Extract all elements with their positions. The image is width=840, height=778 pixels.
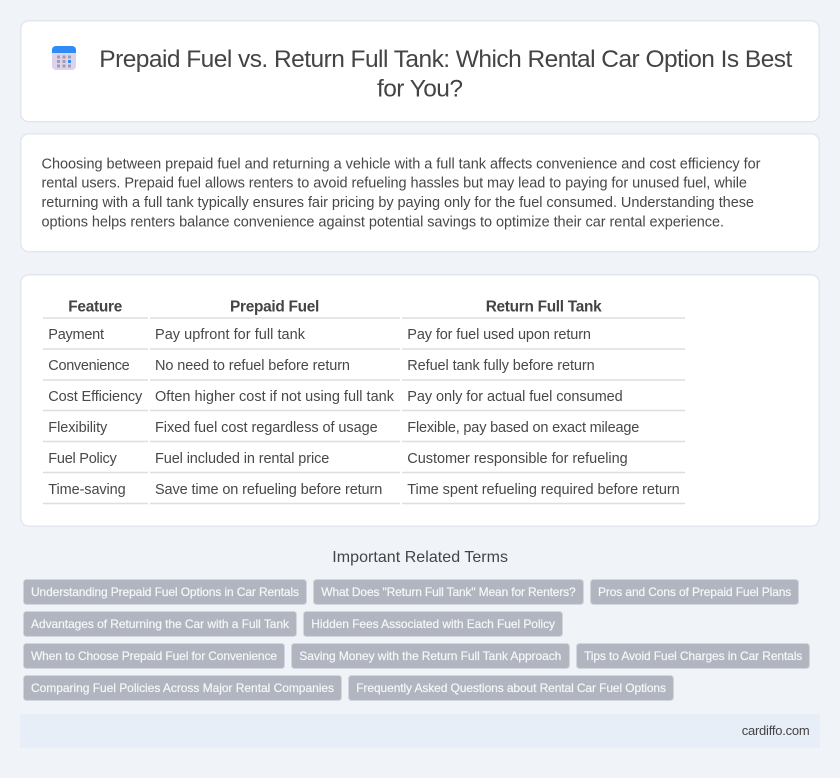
tag	[292, 644, 570, 668]
tag: Advantages of Returning the Car with a Full Tank	[31, 617, 290, 631]
table header row	[43, 299, 685, 318]
tag	[590, 580, 798, 604]
table row: payment	[43, 327, 685, 349]
table row: flexibility: Fixed fuel cost regardless of usage	[155, 420, 378, 436]
tag: Pros and Cons of Prepaid Fuel Plans	[598, 585, 791, 599]
text block: introduction paragraph: rental users. Prepaid fuel allows renters to avoid refueling hassles but may lead to paying for unused fuel, while	[42, 176, 747, 192]
table row: time-saving: Time spent refueling required before return	[407, 482, 680, 498]
tag: What Does "Return Full Tank" Mean for Renters?	[321, 585, 576, 599]
table header row: Prepaid Fuel	[230, 299, 319, 316]
text block: introduction paragraph: Choosing between prepaid fuel and returning a vehicle with a full tank affects convenience and cost efficiency for	[42, 156, 761, 172]
tag	[304, 612, 562, 636]
heading: important related terms: Important Related Terms	[332, 549, 508, 566]
footer: cardiffo.com	[742, 723, 810, 738]
tag: Hidden Fees Associated with Each Fuel Policy	[311, 617, 555, 631]
table row: payment: Pay upfront for full tank	[155, 327, 306, 343]
table row: payment: Payment	[48, 327, 104, 343]
table header row: Return Full Tank	[486, 299, 602, 316]
panel: related term tags	[24, 580, 810, 700]
table row: time-saving	[43, 482, 685, 504]
table row: payment: Pay for fuel used upon return	[407, 327, 591, 343]
tag	[348, 676, 674, 700]
text block: introduction paragraph: options helps renters balance convenience against potential savings to optimize their car rental experience.	[42, 214, 724, 230]
tag: When to Choose Prepaid Fuel for Convenience	[31, 649, 277, 663]
table row: flexibility: Flexible, pay based on exact mileage	[407, 420, 639, 436]
text block: introduction paragraph: returning with a full tank typically ensures fair pricing by paying only for the fuel consumed. Understanding these	[42, 195, 754, 211]
table row: cost efficiency: Pay only for actual fuel consumed	[407, 389, 623, 405]
tag	[24, 580, 306, 604]
table row: cost efficiency: Often higher cost if not using full tank	[155, 389, 395, 405]
tag	[24, 612, 296, 636]
table row: convenience: Convenience	[48, 358, 130, 374]
table row: fuel policy: Fuel included in rental price	[155, 451, 329, 467]
tag: Understanding Prepaid Fuel Options in Car Rentals	[31, 585, 299, 599]
tag	[24, 644, 284, 668]
table row: convenience: Refuel tank fully before return	[407, 358, 595, 374]
table row: convenience	[43, 358, 685, 380]
tag: Saving Money with the Return Full Tank Approach	[299, 649, 561, 663]
table row: flexibility	[43, 420, 685, 442]
title: for You?	[377, 75, 463, 102]
title: Prepaid Fuel vs. Return Full Tank: Which Rental Car Option Is Best	[99, 46, 792, 73]
table row: fuel policy: Fuel Policy	[48, 451, 117, 467]
table row: cost efficiency	[43, 389, 685, 410]
icon: calendar	[52, 46, 76, 70]
table row: convenience: No need to refuel before return	[155, 358, 350, 374]
title	[99, 46, 792, 102]
tag	[576, 644, 810, 668]
tag	[24, 676, 342, 700]
table row: fuel policy	[43, 451, 685, 472]
table row: cost efficiency: Cost Efficiency	[48, 389, 143, 405]
tag: Tips to Avoid Fuel Charges in Car Rentals	[584, 649, 802, 663]
table row: flexibility: Flexibility	[48, 420, 108, 436]
table header row: Feature	[68, 299, 123, 316]
table row: time-saving: Save time on refueling before return	[155, 482, 382, 498]
panel: introduction	[21, 134, 819, 252]
panel: comparison table	[21, 275, 819, 526]
tag: Comparing Fuel Policies Across Major Rental Companies	[31, 681, 334, 695]
tag	[314, 580, 584, 604]
text block: introduction paragraph	[42, 156, 761, 230]
footer	[20, 714, 820, 748]
table row: fuel policy: Customer responsible for refueling	[407, 451, 628, 467]
table row: time-saving: Time-saving	[48, 482, 126, 498]
panel: title card	[21, 21, 819, 122]
tag: Frequently Asked Questions about Rental Car Fuel Options	[356, 681, 666, 695]
